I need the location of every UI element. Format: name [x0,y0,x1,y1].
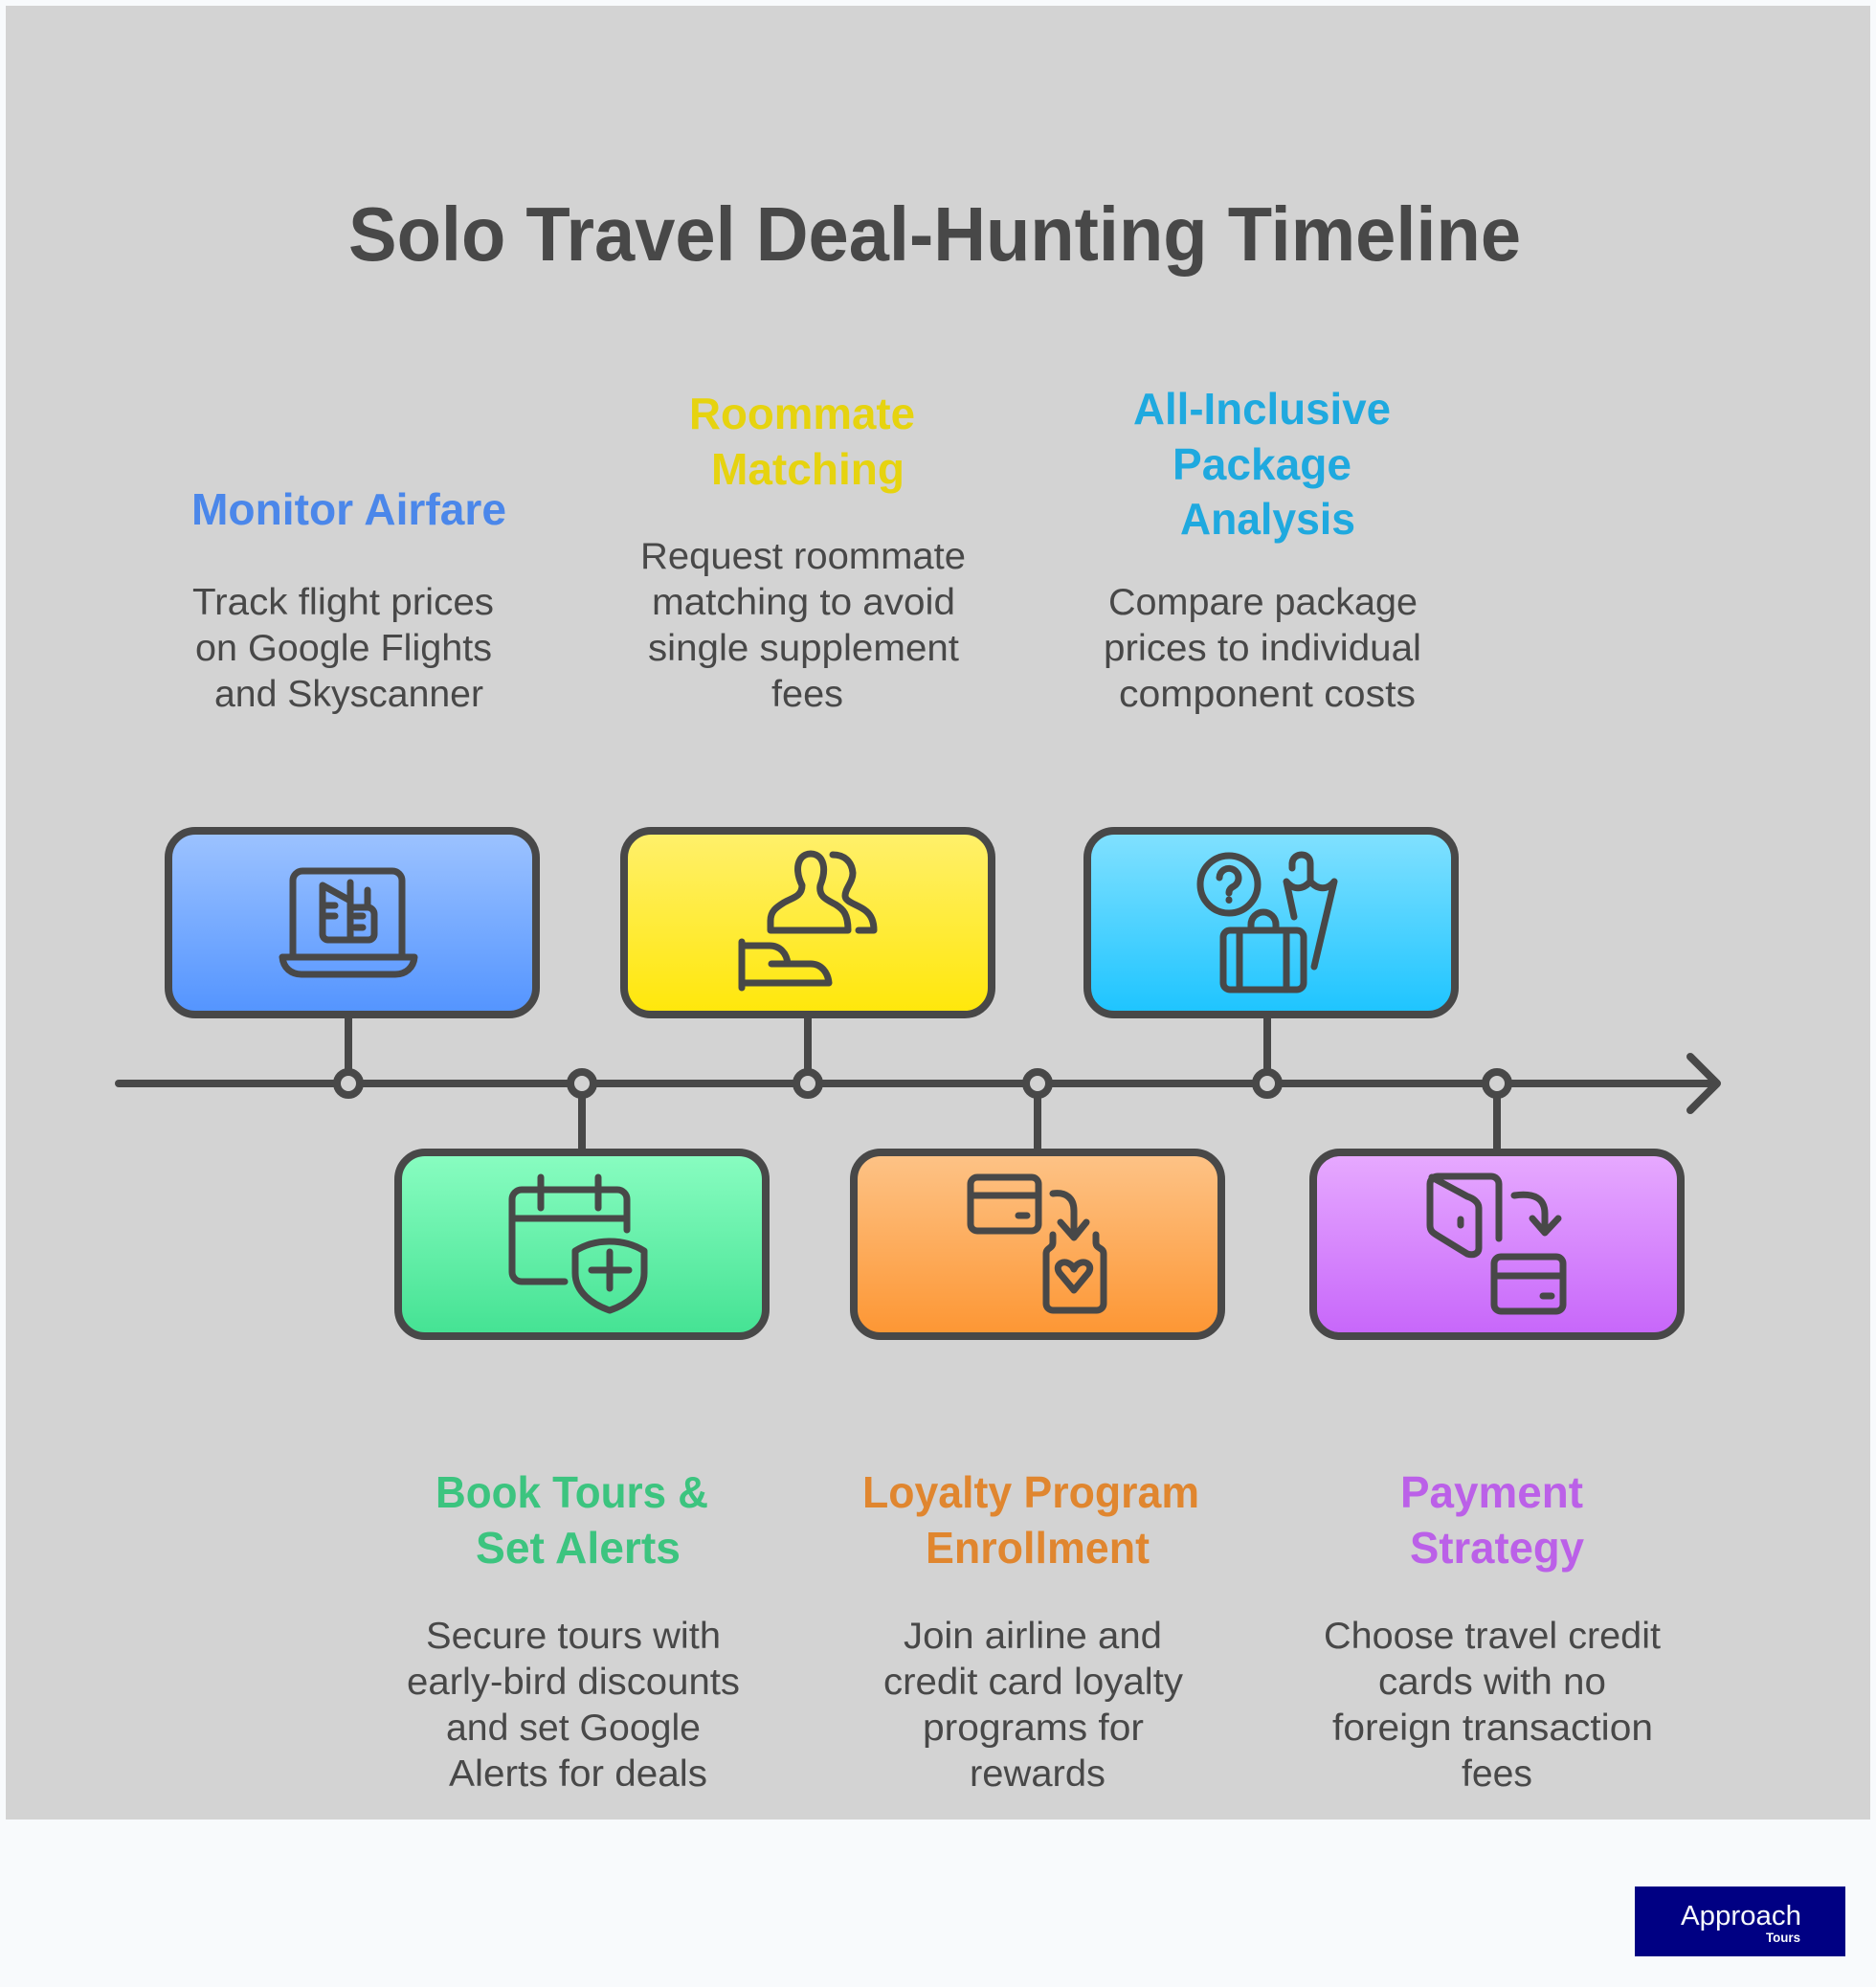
panel: monitor airfare [168,484,536,1015]
text: package analysis description: prices to individual [1104,628,1421,669]
text: package analysis description [1104,582,1421,715]
text: roommate matching description: Request roommate [640,536,966,577]
heading: payment strategy [1400,1467,1584,1573]
card: cyan [1087,831,1455,1015]
text: book tours description [407,1616,740,1795]
heading: book tours and set alerts [436,1467,708,1573]
heading: roommate matching [689,389,915,494]
text: loyalty description: credit card loyalty [883,1662,1184,1703]
timeline axis [119,1017,1717,1149]
heading: loyalty program enrollment [862,1467,1199,1573]
heading: all-inclusive package analysis: Package [1172,439,1351,489]
heading: all-inclusive package analysis: All-Inclusive [1133,384,1391,434]
panel: all-inclusive package analysis [1087,384,1455,1015]
heading: book tours and set alerts: Book Tours & [436,1467,708,1517]
text: payment description: cards with no [1378,1662,1606,1703]
text: package analysis description: component costs [1119,674,1416,715]
heading: all-inclusive package analysis [1133,384,1391,544]
icon: laptop with buildings [282,871,414,974]
text: loyalty description: rewards [970,1753,1106,1795]
text: monitor airfare description: and Skyscanner [214,674,483,715]
text: roommate matching description: matching to avoid [652,582,955,623]
heading: all-inclusive package analysis: Analysis [1180,494,1355,544]
text: payment description [1324,1616,1661,1795]
text: payment description: fees [1462,1753,1532,1795]
icon: people and hand [742,854,874,988]
heading: payment strategy: Payment [1400,1467,1583,1517]
text: book tours description: early-bird discounts [407,1662,740,1703]
icon: wallet to credit card [1430,1176,1563,1311]
card: yellow [624,831,992,1015]
text: book tours description: Alerts for deals [449,1753,707,1795]
heading: monitor airfare: Monitor Airfare [191,484,506,534]
logo: approach tours [1635,1887,1845,1956]
text: roommate matching description [640,536,966,715]
panel: book tours and set alerts [398,1152,766,1795]
card: orange [854,1152,1221,1336]
card: purple [1313,1152,1681,1336]
title: Solo Travel Deal-Hunting Timeline [348,191,1521,277]
card: green [398,1152,766,1336]
text: book tours description: Secure tours with [426,1616,721,1657]
text: payment description: Choose travel credit [1324,1616,1661,1657]
text: loyalty description: Join airline and [904,1616,1162,1657]
icon: question, suitcase and umbrella [1200,855,1334,990]
icon: card to loyalty tag [971,1177,1104,1310]
card: blue [168,831,536,1015]
text: loyalty description: programs for [923,1708,1144,1749]
heading: roommate matching: Matching [711,444,904,494]
panel: payment strategy [1313,1152,1681,1795]
panel: roommate matching [624,389,992,1015]
text: roommate matching description: fees [771,674,843,715]
text: monitor airfare description: Track flight prices [192,582,494,623]
text: loyalty description [883,1616,1184,1795]
text: package analysis description: Compare package [1108,582,1418,623]
logo: approach tours: Approach [1681,1901,1801,1931]
icon: calendar with shield [512,1177,644,1310]
heading: roommate matching: Roommate [689,389,915,438]
text: monitor airfare description [192,582,494,715]
heading: loyalty program enrollment: Loyalty Program [862,1467,1199,1517]
text: book tours description: and set Google [446,1708,701,1749]
text: payment description: foreign transaction [1332,1708,1653,1749]
text: roommate matching description: single supplement [648,628,959,669]
heading: loyalty program enrollment: Enrollment [926,1523,1150,1573]
heading: book tours and set alerts: Set Alerts [476,1523,681,1573]
heading: payment strategy: Strategy [1410,1523,1584,1573]
text: monitor airfare description: on Google Flights [195,628,492,669]
panel: loyalty program enrollment [854,1152,1221,1795]
logo: approach tours: Tours [1766,1930,1800,1945]
